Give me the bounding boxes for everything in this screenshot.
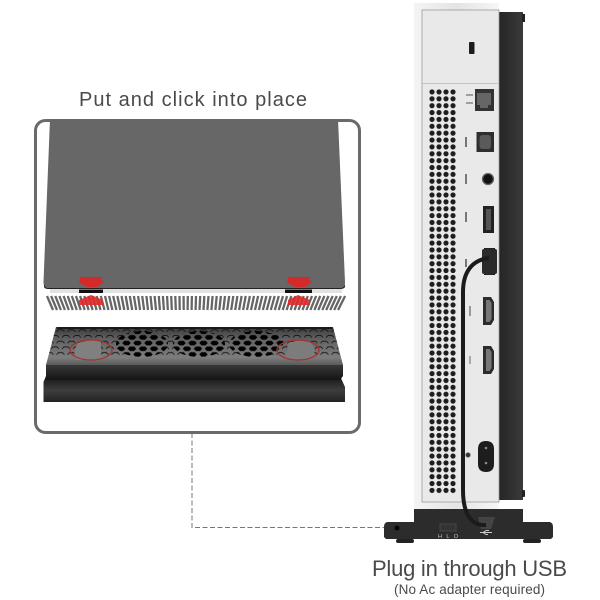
usb port on stand (478, 517, 495, 529)
white console body (414, 3, 499, 509)
usb symbol (480, 530, 492, 534)
usb port two with plug (465, 248, 497, 275)
left click markers (78, 277, 104, 305)
screw (466, 452, 470, 458)
fan indicator dot (394, 526, 400, 530)
dark side panel (499, 12, 523, 500)
ethernet port (466, 89, 494, 111)
vent strip (47, 289, 345, 310)
hdmi out (469, 297, 494, 325)
top rim (57, 327, 333, 329)
left foot pad (396, 539, 414, 543)
divider (422, 82, 499, 85)
right clip patch (286, 341, 315, 359)
stand front (46, 364, 343, 380)
audio jack (465, 174, 494, 184)
caption: plug in through usb: Plug in through USB (372, 556, 567, 581)
caption: no adapter required: (No Ac adapter required) (394, 582, 545, 597)
heading: put and click into place: Put and click into place (79, 89, 307, 111)
stand foot (384, 509, 553, 539)
inner panel (422, 10, 499, 502)
right red circle (277, 340, 319, 360)
left red circle (70, 340, 112, 360)
side latch (522, 14, 525, 22)
speed labels: H L O (438, 534, 459, 540)
usb cable (463, 258, 489, 525)
left clip patch (74, 340, 101, 360)
cooling stand (40, 327, 350, 402)
optical port (465, 132, 494, 152)
dashed connector (192, 433, 393, 528)
vent holes (428, 88, 456, 494)
power socket (478, 441, 494, 472)
right foot pad (523, 539, 541, 543)
usb port one (465, 206, 494, 233)
speed switch (440, 524, 456, 531)
side knob (522, 490, 525, 497)
lock slot (469, 42, 474, 54)
panel: installation detail (36, 119, 360, 432)
grey console underside (44, 119, 345, 288)
hdmi in (469, 346, 494, 374)
console bottom edge (44, 284, 345, 289)
stand base (44, 376, 345, 402)
stand top face (46, 327, 343, 365)
right click markers (285, 277, 312, 305)
console with stand (384, 3, 553, 543)
